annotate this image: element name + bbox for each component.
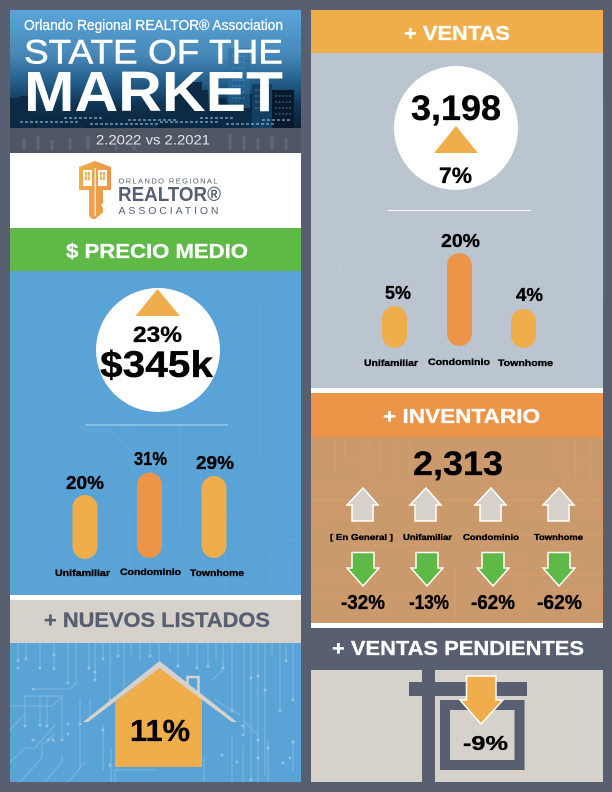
bar: condominio: 31% — [134, 449, 167, 469]
column: unifamiliar — [403, 488, 453, 614]
bar: townhome: Townhome — [190, 568, 244, 579]
heading: ventas pendientes: + VENTAS PENDIENTES — [332, 638, 584, 660]
icon: down arrow — [460, 676, 503, 724]
pending sales value: -9% — [463, 733, 508, 755]
bar: unifamiliar: Unifamiliar — [364, 358, 418, 369]
column: en general: -32% — [341, 592, 385, 614]
panel: ventas — [311, 10, 603, 388]
panel: inventario — [311, 393, 603, 623]
circle: median price — [96, 288, 220, 412]
column: unifamiliar: Unifamiliar — [403, 532, 453, 542]
bar chart: price by property type — [55, 449, 244, 579]
heading: inventario: + INVENTARIO — [383, 406, 540, 428]
new listings value: 11% — [130, 713, 190, 748]
column: unifamiliar: -13% — [409, 592, 449, 614]
date comparison: 2.2022 vs 2.2021 — [96, 132, 210, 148]
panel: precio medio — [10, 228, 301, 595]
inventory total: 2,313 — [413, 445, 503, 483]
bar: townhome: Townhome — [498, 358, 553, 369]
market: MARKET — [24, 60, 283, 124]
heading: precio medio: $ PRECIO MEDIO — [66, 241, 248, 263]
bar: townhome: 29% — [196, 453, 234, 473]
icon: for-sale sign — [409, 676, 527, 770]
panel: ventas pendientes — [311, 638, 603, 782]
sales change: 7% — [439, 163, 472, 188]
bar: townhome — [498, 285, 553, 369]
heading: inventario — [311, 393, 603, 437]
bar: unifamiliar: 5% — [385, 283, 411, 303]
column: en general — [330, 488, 393, 614]
logo panel — [10, 153, 301, 228]
heading: nuevos listados: + NUEVOS LISTADOS — [44, 609, 270, 632]
median price value: $345k — [100, 344, 213, 385]
bar: condominio: Condominio — [428, 357, 490, 368]
icon: up triangle — [136, 289, 180, 316]
header: state of the market — [10, 10, 301, 153]
icon: house key — [79, 161, 111, 219]
icon: up triangle — [434, 126, 478, 153]
bar: townhome: 4% — [516, 285, 543, 305]
bar: unifamiliar: Unifamiliar — [55, 568, 110, 579]
column: townhome: -62% — [537, 592, 582, 614]
association name: Orlando Regional REALTOR® Association — [24, 18, 283, 34]
logo wordmark: ORLANDO REGIONAL — [118, 176, 218, 186]
icon: house with percentage — [83, 661, 237, 767]
heading: nuevos listados — [10, 600, 301, 643]
bar: unifamiliar — [55, 473, 110, 579]
state of the: STATE OF THE — [24, 34, 283, 72]
logo wordmark — [118, 176, 221, 217]
heading: ventas — [311, 10, 603, 53]
panel: nuevos listados — [10, 600, 301, 782]
column: townhome: Townhome — [534, 532, 583, 542]
bar: condominio — [428, 231, 490, 368]
reflection band with date — [10, 128, 301, 153]
bar: unifamiliar: 20% — [66, 473, 104, 493]
column: condominio: Condominio — [463, 532, 519, 542]
column: en general: [ En General ] — [330, 532, 393, 542]
column: condominio — [463, 488, 519, 614]
logo wordmark: ASSOCIATION — [118, 205, 218, 217]
heading: ventas: + VENTAS — [404, 23, 510, 45]
city skyline photo — [10, 10, 301, 128]
circle: sales total — [394, 66, 518, 190]
bar: townhome — [190, 453, 244, 579]
column: condominio: -62% — [471, 592, 515, 614]
heading: precio medio — [10, 228, 301, 271]
logo wordmark: REALTOR® — [118, 184, 221, 206]
bar: condominio — [120, 449, 181, 578]
bar chart: sales by property type — [364, 231, 553, 369]
bar: condominio: Condominio — [120, 567, 181, 578]
bar: unifamiliar — [364, 283, 418, 369]
bar: condominio: 20% — [441, 231, 480, 251]
sales value: 3,198 — [411, 89, 501, 128]
column: townhome — [534, 488, 583, 614]
price change: 23% — [133, 322, 182, 347]
